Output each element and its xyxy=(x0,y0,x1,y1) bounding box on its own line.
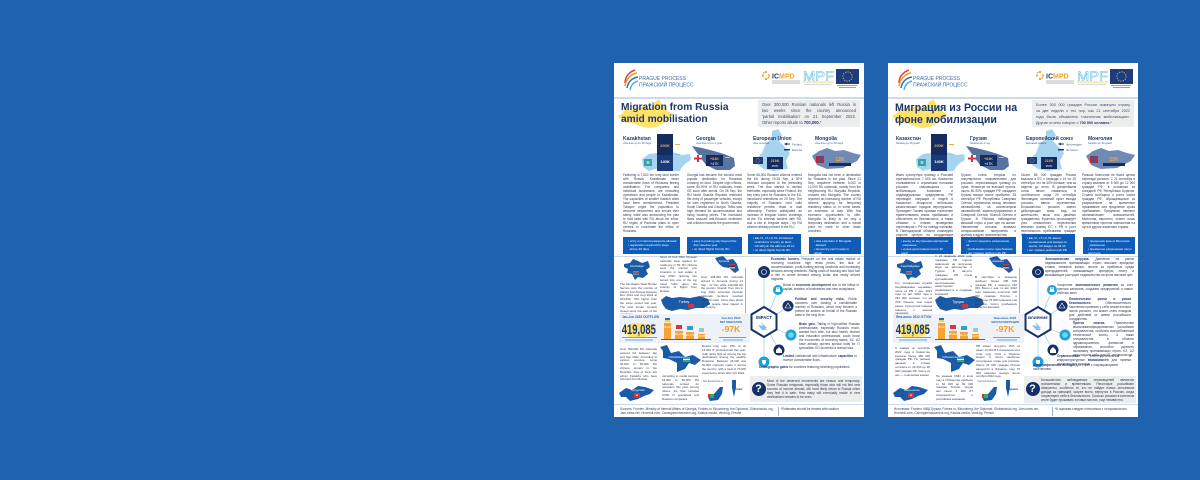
map: Turkey xyxy=(661,296,710,311)
heading: Казахстан xyxy=(896,136,921,142)
chart: bars and total: Янв-июнь 2022 ОТТОК xyxy=(896,315,931,319)
chart: Georgia map xyxy=(692,146,735,170)
map: Armenia: Армения xyxy=(992,259,1004,263)
text: Mongolia has not been a destination for Russians in the past. Since 21 Sep, anywhere between 5,000 to 12,000 RU nationals, mostly from the neighbouring RU Buryatia Republic, crossed into Mongolia. The country reported an increasing number of RU citizens applying for temporary residency status or, in some cases, an extension of stay. With few economic opportunities to offer, Mongolia is likely to be only a temporary destination and a transit point en route to other Asian countries. xyxy=(808,173,861,233)
text: brain gain: Brain gain. Taking in high-skilled Russian professionals, especially Russia's much-wanted tech elite, but also health, finance and education professionals, could boost the economies of receiving states. KZ, UZ have already opened special hubs for IT specialists; KG launched a nomad visa. xyxy=(799,322,860,350)
chart: EU map and legend: 157K xyxy=(1045,164,1053,168)
text: Uzbekistan: По данным СМИ, в этом году в Узбекистан прибыло от 64 000 до 80 000 граждан России. Среди них около 4 000 ИТ специалистов и российские компании. xyxy=(936,374,973,401)
chart: EU map and legend: Финляндия xyxy=(1066,142,1082,146)
text: Turkey: С 21 февраля 2022 года граждане РФ подали заявления на получение вида на жительство в Турции. В августе граждане РФ стали крупнейшими иностранными инвесторами в недвижимость и создание компаний. xyxy=(935,254,972,296)
panel: European Union xyxy=(747,129,802,254)
heading xyxy=(753,136,792,145)
key facts: • EE, FI, LT, LV, PL ввели xyxy=(1027,236,1061,240)
text: Georgia has become the second most popular destination for Russians crossing on land. Despite high inflows, some 80-90% of RU nationals, leave GE soon after arrival. On 28 Sep, the RU North Ossetia Republic restricted the entry of passenger vehicles, except for cars registered in North Ossetia, South Ossetia and Georgia. Tbilisi saw high demand for accommodation and rising housing prices. The increased flows aroused anti-Russian sentiment and criticism towards the government. xyxy=(687,173,742,225)
key facts: • no direct flights from/to RU xyxy=(692,247,729,251)
chart: Kazakhstan map and bar xyxy=(916,134,965,171)
logo: ICMPD: ICMPD xyxy=(772,74,795,80)
heading: European Union xyxy=(753,136,792,142)
key facts: • visa extension in Mongolia xyxy=(814,239,851,243)
chart: Georgia map: +47K xyxy=(710,162,719,166)
key facts: • registration required for stays xyxy=(628,243,669,247)
key facts: CZ will join the effort on 26.10 xyxy=(755,244,794,248)
intro callout: Более 300 000 граждан России покинули страну xyxy=(1036,102,1130,106)
panel: European Union xyxy=(1020,129,1082,255)
text: Kazakhstan inflow note: С января по сентябрь 2022 года в Казахстан въехало более 350 000 граждан РФ. По разным данным, в стране остались от 30 000 до 90 000 граждан РФ. Часть из них — этнические казахи. xyxy=(895,346,930,377)
text: Раньше Монголия не была целью переезда россиян. С 21 сентября в страну въехали от 5 000 до 12 000 граждан РФ, в основном из соседней РФ Республики Бурятия. Страна сообщила о росте числа граждан РФ, обращающихся за разрешением на временное проживание или продление срока пребывания. Предлагая немного экономических возможностей, Монголия, вероятно, станет лишь временным пунктом назначения на пути в другие азиатские страны. xyxy=(1082,173,1135,229)
chart: bars and total xyxy=(893,314,1024,343)
text: economic development: Boost to economic development due to the inflow of capital, creation of businesses and new workplaces. xyxy=(783,283,859,291)
chart: bars and total: 30,176 xyxy=(686,333,695,337)
diagram: impact hexagon and connectors: ВЛИЯНИЕ xyxy=(1028,315,1048,320)
intro callout: 'partial mobilisation' on 21 September 2022. xyxy=(762,114,856,119)
chart: EU map and legend: Estonia xyxy=(792,148,802,152)
chart: bars and total: 30,176 xyxy=(960,333,969,337)
chart: Georgia map: +47K xyxy=(984,162,993,166)
key facts: first visa-free year xyxy=(694,243,718,247)
key facts: • temporary permit easy to obtain xyxy=(814,247,849,255)
panel: Georgia xyxy=(687,136,742,254)
map: UAE and Israel xyxy=(703,379,743,401)
map: Azerbaijan: Azerbaijan xyxy=(630,264,644,268)
key facts xyxy=(809,237,861,254)
map: Azerbaijan: Азербайджан xyxy=(901,264,920,268)
title with yellow Russia map xyxy=(618,99,729,128)
title with yellow Russia map xyxy=(892,99,1018,128)
chart: bars and total: 20,075 xyxy=(972,335,980,338)
key facts: ограничения для въезда по xyxy=(1029,240,1067,244)
text: limited capacities: Ограниченные институциональные и инфраструктурные возможности для приема значительных потоков. xyxy=(1057,354,1131,366)
chart: Kazakhstan map and bar: 140K xyxy=(934,159,944,164)
text: economic development: Ускорение экономического развития за счет притока капитала, создания предприятий и новых рабочих мест. xyxy=(1057,283,1133,295)
chart: EU map and legend: Эстония xyxy=(1066,148,1078,152)
logo: Prague Process xyxy=(624,69,694,90)
chart: EU map and legend: 218K xyxy=(771,159,780,163)
heading: Монголия xyxy=(1088,136,1112,142)
key facts: разрешено xyxy=(1090,243,1105,247)
panel: Mongolia: visa-free up to 30 days xyxy=(815,141,843,145)
text: economic burden: Economic burden. Pressure on the real estate market of receiving countries: high rental prices, the lack of accommodation, profit-hunting among landlords and increasing tensions among residents. Rising costs of housing and food fuel a rise in unmet demand among locals and newly arrived migrants. xyxy=(771,257,860,281)
map: Armenia xyxy=(715,256,739,273)
chart: Georgia map xyxy=(960,133,1020,173)
text: political and security risks: Политические риски и риски безопасности. Обеспокоенность населения приемом у себя значительного числа россиян, что может стать поводом для действий от имени российского государства. xyxy=(1069,297,1131,321)
diagram: impact hexagon and connectors: IMPACT xyxy=(756,315,772,320)
chart: bars and total: Jan-Jun 2022 OUTFLOW xyxy=(622,315,659,319)
heading xyxy=(896,136,921,145)
icon: question mark xyxy=(1026,382,1040,396)
map: Kyrgyzstan: Кыргызстан xyxy=(904,388,920,392)
intro callout xyxy=(758,100,860,127)
map: Uzbekistan: Uzbekistan xyxy=(669,355,684,359)
heading: Mongolia xyxy=(815,136,837,142)
map: Turkey: Turkey xyxy=(679,300,690,304)
key facts: • въезд по внутренним паспортам xyxy=(901,239,948,243)
map: Kyrgyzstan xyxy=(619,386,654,401)
text: brain gain: Приток мозгов. Привлечение высококвалифицированных российских специалистов, особенно востребованной технической элиты, а также специалистов в области здравоохранения, финансов и образования, способно укрепить экономику принимающих стран. KZ, UZ уже создали хабы для ИТ-специалистов. xyxy=(1073,321,1134,357)
panel: Mongolia xyxy=(808,136,861,255)
logo: ICMPD xyxy=(762,71,800,84)
chart: Mongolia map: 12K xyxy=(835,157,845,163)
chart: bars and total xyxy=(622,315,746,340)
chart: bars and total: ЧИСТАЯ МИГРАЦИЯ xyxy=(991,320,1019,324)
key facts: • easy to prolong stay beyond the xyxy=(692,239,736,243)
heading: Kazakhstan xyxy=(623,136,651,142)
intro callout: года была объявлена «частичная мобилизация». xyxy=(1036,115,1130,119)
chart: Mongolia map xyxy=(1081,133,1137,173)
key facts: • нет прямых рейсов из/в РФ xyxy=(1027,248,1067,252)
logo: EU flag xyxy=(1110,69,1133,88)
chart: Georgia map: +84K xyxy=(984,157,993,161)
key facts: пребывание после года безвиза xyxy=(968,247,1012,251)
panel: Kazakhstan: безвиз до 30 дней xyxy=(896,141,920,145)
text: Uzbekistan: According to media sources, 64,000 to 80,000 RU nationals arrived for relocation this year. Among others, the flow includes 4,000 IT specialists and Russian companies. xyxy=(662,374,699,401)
key facts: • нужна регистрация после 30 дней xyxy=(901,247,943,255)
heading: Грузия xyxy=(970,136,987,142)
logo: Prague Process xyxy=(898,69,968,90)
logo: Prague Process: PRAGUE PROCESS xyxy=(639,76,687,82)
chart: EU map and legend: Finland xyxy=(792,142,802,146)
map: UAE and Israel: Net departures to xyxy=(703,379,724,383)
text: Most of the observed movements are reason and temporary. Some Russian emigrants, especially those who will not find new sources of income abroad, will most likely return to Russia when they feel it is safe. How many will eventually reside in new destinations remains to be seen. xyxy=(767,379,860,399)
chart: EU map and legend: 157K xyxy=(771,164,779,168)
panel: outflow and net migration chart band xyxy=(619,314,750,343)
key facts xyxy=(687,237,742,254)
chart: bars and total: -97K xyxy=(722,324,741,334)
text: Featuring a 7,600 km long land border with Russia, Kazakhstan faces considerable flows of Russians fleeing mobilisation. The companies and individual businesses, are relocating operations and people to Kazakhstan. The capacities of smaller Kazakh cities have been overstretched. President Tokayev urged the population to welcome newcomers and ensure their safety, while also announcing the plan to hold talks with RU about the influx. RU region of Pavlodar plans to open centres to coordinate the inflow of Russians. xyxy=(623,173,679,233)
key facts: • временное разрешение легко получить xyxy=(1088,247,1131,255)
diagram: impact hexagon and connectors xyxy=(750,266,796,368)
panel: Kazakhstan: visa-free up to 30 days xyxy=(623,141,651,145)
chart: Kazakhstan map and bar: 140K xyxy=(660,159,670,164)
chart: Mongolia map: 12K xyxy=(1109,157,1119,163)
panel: European Union: визовый режим xyxy=(1026,141,1046,145)
icon: question mark xyxy=(752,382,766,396)
panel: Mongolia xyxy=(1081,133,1137,255)
map: Azerbaijan xyxy=(624,259,650,280)
title with yellow Russia map: фоне мобилизации xyxy=(895,114,997,126)
title with yellow Russia map: amid mobilisation xyxy=(621,114,708,125)
heading xyxy=(815,136,844,145)
key facts: • продление визы в Монголии xyxy=(1088,239,1129,243)
panel: outflow and net migration chart band xyxy=(893,314,1024,343)
note: *К оценкам следует относиться с осторожностью xyxy=(1055,407,1127,411)
text: Около 66 000 граждан России въехали в ЕС с периода с 19 по 25 сентября, что на 30% больше, чем за неделю до этого. В дальнейшем поток начал снижаться, в особенности когда 29 сентября Финляндия, основной пункт въезда россиян, ввела ограничения. Большинство россиян имеют действующие визы, вид на жительство, визы или двойное гражданство. Фронтекс прогнозирует рост незаконного пересечения внешних границ ЕС с РФ и рост нелегального пребывания граждан РФ. xyxy=(1021,173,1076,237)
text: Armenia: Over 238,000 RU nationals arrived in Armenia during 21 Sep - 17 Oct, while 140,000 left the country. Overall, from Jan to Aug 2022, Armenian Russian nationals numbers reached 438,000 visits. Since then about 75,000 people have stayed in the country. xyxy=(701,275,743,309)
key facts: • EE, FI, LT, LV, PL introduced xyxy=(753,236,793,240)
icon: question mark: ? xyxy=(1029,383,1036,395)
text: limited capacities: Limited institutional and infrastructure capacities to receive considerable flows. xyxy=(783,354,857,362)
key facts: • entry on internal passports allowed xyxy=(628,239,676,243)
logo: Prague Process: ПРАЖСКИЙ ПРОЦЕСС xyxy=(639,80,694,88)
chart: bars and total: 38,066 xyxy=(949,332,958,336)
panel: Kazakhstan xyxy=(896,134,965,255)
chart: Georgia map: +84K xyxy=(710,157,719,161)
map: Kyrgyzstan: Kyrgyzstan xyxy=(631,388,645,392)
text: Грузия стала вторым по популярности направлением для россиян, пересекающих границу по суше. Несмотря на высокий приток, около 80-90% граждан РФ покидают Грузию вскоре после прибытия. 28 сентября РФ Республика Северная Осетия ограничила въезд легковых автомобилей, за исключением автомобилей, зарегистрированных в Северной Осетии, Южной Осетии и Грузии. В Тбилиси наблюдался высокий спрос и рост цен на жилье. Увеличение потоков вызвало антироссийские настроения и критику в адрес правительства. xyxy=(961,173,1016,237)
text: Большинство наблюдаемых перемещений являются транзитными и временными. Некоторые российские эмигранты, особенно те, кто не найдет новых источников дохода за границей, скорее всего, вернутся в Россию, когда почувствуют себя в безопасности. Сколько россиян в конечном итоге будет проживать в новых местах, еще неизвестно. xyxy=(1041,378,1134,402)
note: *Estimates should be treated with caution xyxy=(781,407,839,411)
chart: bars and total: 419,085 xyxy=(896,322,930,337)
map: Azerbaijan xyxy=(895,258,925,282)
logo: Prague Process: PRAGUE PROCESS xyxy=(913,76,961,82)
map: UAE and Israel: Israel xyxy=(736,387,743,391)
key facts xyxy=(748,234,801,254)
map: Turkey: Турция xyxy=(952,300,964,304)
map: Armenia: Armenia xyxy=(719,259,730,263)
text: Kazakhstan inflow note: Over 350,000 RU nationals entered KZ between Jan and Sep 2022. According to various sources, some 30,000 to 90,000 RU citizens remain in the Republic. Few of them are ethnic Kazakhs who have returned from Russia. xyxy=(620,347,657,381)
sources: Источники: Frontex, МВД Грузии, Forbes.ru, Bloomberg, the Diplomat, Globalnstuio.org, Jam-news.net, Hromedi.com, Carnegieendowment.org, Kastus.media, Vesti.kg, Prestel xyxy=(894,407,1039,415)
title with yellow Russia map: Миграция из России на xyxy=(895,102,1017,114)
intro callout: Over 300,000 Russian nationals left Russia in xyxy=(762,102,856,106)
map: Turkey xyxy=(934,294,986,314)
panel: Kazakhstan xyxy=(623,134,691,254)
heading xyxy=(623,136,652,145)
page: English infographic xyxy=(614,63,864,417)
key facts: • no direct flights from/to RU xyxy=(753,248,790,252)
key facts xyxy=(961,237,1016,254)
key facts xyxy=(896,237,953,254)
text: Имея сухопутную границу с Россией протяженностью 7 600 км, Казахстан сталкивается с огромными потоками россиян, спасающихся от мобилизации. Компании и индивидуальные предприятия РФ переводят операции и людей в Казахстан. Мощности небольших казахстанских городов перегружены. Президент Токаев призвал население приветствовать вновь прибывших и обеспечить их безопасность, а также объявил о планах проведения переговоров с РФ по поводу наплыва. В Павлодарской области планируют открыть центры по координации притока россиян. xyxy=(896,173,953,241)
intro callout: two weeks since the country announced xyxy=(762,108,856,113)
callout: outlook box xyxy=(1024,376,1136,403)
logo: Prague Process: ПРАЖСКИЙ ПРОЦЕСС xyxy=(913,80,968,88)
intro callout: Другие отчеты говорят о 700 000 человек.* xyxy=(1036,121,1112,125)
map: Armenia xyxy=(987,255,1015,275)
key facts: allowed xyxy=(816,243,826,247)
diagram: impact hexagon and connectors xyxy=(1018,258,1078,373)
chart: bars and total: 38,066 xyxy=(675,332,684,336)
chart: EU map and legend xyxy=(753,129,802,171)
chart: bars and total: -97K xyxy=(996,324,1015,334)
chart: Kazakhstan map and bar: 200K xyxy=(934,143,944,148)
intro callout: за две недели с тех пор, как 21 сентября 2022 xyxy=(1036,109,1130,113)
logo: EU flag xyxy=(836,69,859,88)
text: Turkey: Since 21 Feb 2022, Russian nationals have applied for residency in TR. RU citizens were the number one investors in real estate in Aug 2022, opening has turned into one of the top travel hubs given the scarcity of flights from Russia. xyxy=(660,255,697,293)
map: Uzbekistan xyxy=(660,345,701,372)
chart: bars and total: Jan-Jun 2022 xyxy=(721,316,741,320)
intro callout: Other reports allude to 700,000.* xyxy=(762,120,821,125)
callout: outlook box xyxy=(750,376,862,402)
panel: European Union: visa required xyxy=(753,141,769,145)
intro callout xyxy=(1032,100,1134,127)
map: UAE and Israel xyxy=(974,379,1018,404)
chart: Kazakhstan map and bar: 200K xyxy=(660,143,670,148)
icon: question mark: ? xyxy=(755,383,762,395)
heading xyxy=(696,136,722,145)
map: Uzbekistan: Узбекистан xyxy=(942,355,958,359)
map: Uzbekistan xyxy=(933,345,976,373)
key facts: above 30 days xyxy=(630,247,649,251)
text: political and security risks: Political and security risks. Public concerns over hosting a considerable number of Russians, which may become a pretext for actions on behalf of the Russian state in the long term. xyxy=(795,297,857,317)
text: Armenia: В сентябре в Армению прибыло более 238 000 граждан РФ, а покинуло 140 000. Всего с янв. по авг. 2022 года Армению посетили 438 000 граждан России, и примерно 75 000 приехали там остаться. Число прибывших остается высоким. xyxy=(975,275,1017,309)
text: demographic gains: Демографические выгоды для стран с сокращающимся населением. xyxy=(1033,363,1118,371)
text: net loss note: Russia may lose 15% of its 14,000 IT professionals this year. UAE ranks high as among the top destinations among the wealthy Russians. Between 26,000 and 50,000 migrants made it across the country, with a total of 70,000 expected to arrive after Oct 2022. xyxy=(702,344,746,375)
title with yellow Russia map: Migration from Russia xyxy=(621,102,729,113)
chart: bars and total: 20,075 xyxy=(698,335,706,338)
chart: Mongolia map xyxy=(812,148,861,169)
chart: bars and total: 419,085 xyxy=(622,322,656,337)
key facts: земле; CZ введет их 26.10 xyxy=(1029,244,1065,248)
text: Some 66,000 Russian citizens entered the EU during 19-25 Sep, a 30% increase compared to the preceding week. The flow started to decline thereafter, especially since Finland, the key entry point for Russians to the EU, introduced restrictions on 29 Sep. The majority of Russians hold valid residence permits, visas or dual citizenship. Frontex anticipated an increase in irregular border crossings at the EU external borders with RU, and a rise in irregular stays - by RU citizens already present in the EU. xyxy=(747,173,802,229)
text: Azerbaijan: The Azerbaijan State Border Service puts the number of visitors from Russia between Dec 2021 and Aug 2022 at 264,000, 70% higher than the same period last year. The land border remains closed since the start of the pandemic. xyxy=(620,282,657,316)
key facts xyxy=(1022,234,1075,254)
key facts: разрешен xyxy=(903,243,916,247)
panel: Georgia: visa-free up to 1 year xyxy=(696,141,722,145)
panel: Georgia: безвиз на 1 год xyxy=(970,141,990,145)
logo: ICMPD: ICMPD xyxy=(1046,74,1069,80)
heading: Европейский союз xyxy=(1026,136,1073,142)
map: Kyrgyzstan xyxy=(892,384,930,403)
logo: ICMPD xyxy=(1036,71,1074,84)
chart: bars and total: Янв-июнь 2022 xyxy=(994,316,1017,320)
map: UAE and Israel: Чистый выезд в xyxy=(977,379,997,383)
chart: Kazakhstan map and bar xyxy=(642,134,691,171)
footer xyxy=(614,404,864,417)
text: Azerbaijan: Гос. пограничная служба Азербайджана оценивает поток из РФ с дек. 2021 года по авг. 2022 года в 264 000 человек, что на 70% больше, чем годом ранее. Сухопутная граница закрыта с начала пандемии. xyxy=(895,281,932,315)
footer xyxy=(888,404,1138,417)
text: economic burden: Экономическая нагрузка. Давление на рынок недвижимости принимающих стран: высокие арендные ставки, нехватка жилья, погоня за прибылью среди арендодателей, повышающих арендную плату и вызывающих растущее недовольство на фоне высоких цен. xyxy=(1045,257,1134,277)
page: Russian infographic xyxy=(888,63,1138,417)
key facts xyxy=(1083,237,1135,254)
panel: Mongolia: безвиз до 30 дней xyxy=(1088,141,1112,145)
chart: EU map and legend: 218K xyxy=(1045,159,1054,163)
key facts: restrictions to entry on land; xyxy=(755,240,792,244)
chart: bars and total: 78,161 xyxy=(663,325,672,329)
heading: Georgia xyxy=(696,136,715,142)
sources: Sources: Frontex, Ministry of Internal Affairs of Georgia, Forbes.ru, Bloomberg, the Diplomat, Globalnstuio.org, Jam-news.net, Hromedi.com, Carnegieendowment.org, Kastus.media, Vesti.kg, Prestel xyxy=(620,407,773,415)
key facts xyxy=(623,237,680,254)
key facts: • просто продлить разрешение на xyxy=(966,239,1009,247)
panel: Georgia xyxy=(961,136,1016,255)
key facts: • нет прямых рейсов из/в РФ xyxy=(966,251,1006,255)
text: demographic gains: Demographic gains for countries featuring declining populations. xyxy=(759,365,850,369)
text: net loss note: РФ может потерять 15% из своих 14 000 ИТ-специалистов в этом году. ОАЭ и Израиль входят в число наиболее популярных стран для россиян. Около 26 000 граждан России находятся в Израиле, еще 70 000 ожидают въезда после октября 2022 года. xyxy=(976,344,1020,378)
chart: EU map and legend xyxy=(1020,129,1082,173)
chart: bars and total: 78,161 xyxy=(937,325,946,329)
chart: bars and total: NET MIGRATION xyxy=(720,320,742,324)
